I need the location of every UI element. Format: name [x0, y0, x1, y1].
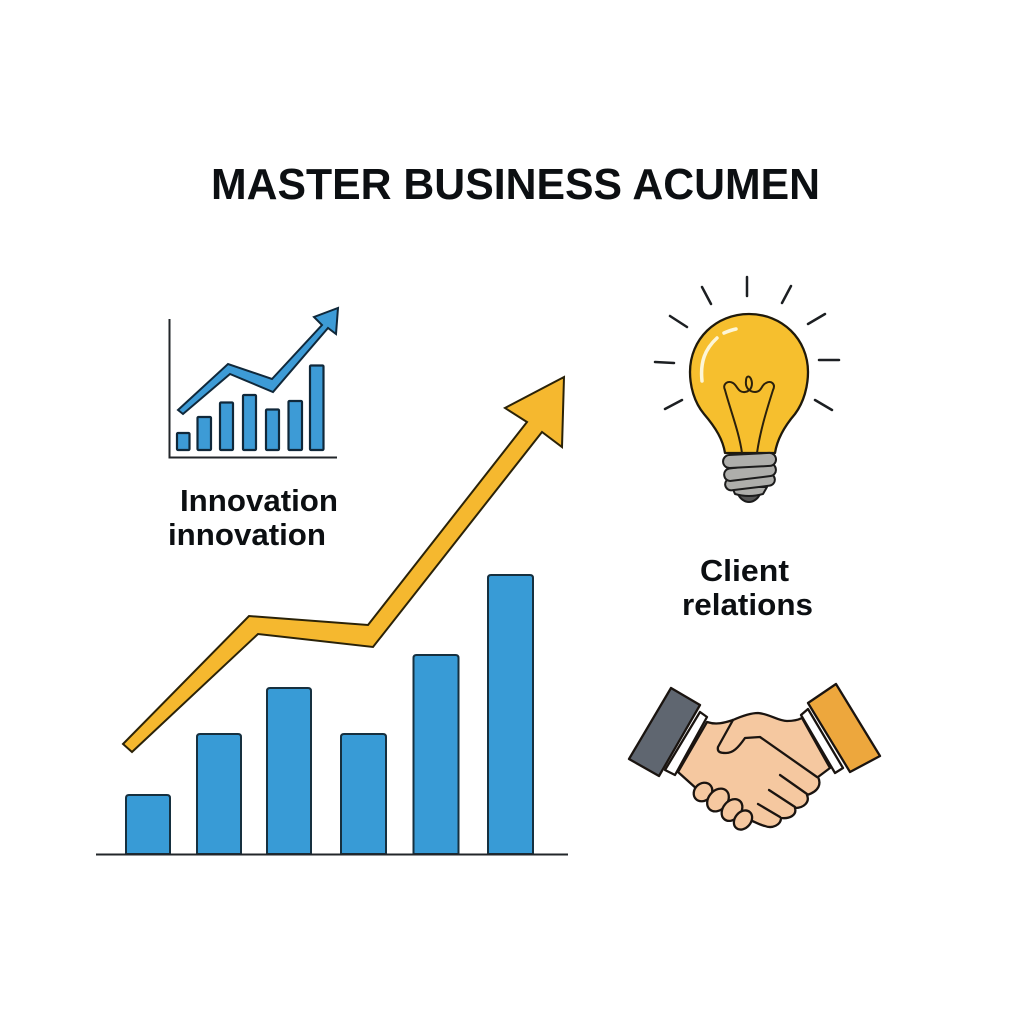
label: innovation: Innovation — [180, 483, 338, 518]
bulb glass — [690, 314, 808, 453]
label: client relations: relations — [682, 587, 813, 622]
clasped hands — [678, 713, 830, 827]
bulb filament — [724, 377, 774, 453]
title: MASTER BUSINESS ACUMEN — [211, 160, 820, 209]
left dark jacket sleeve — [629, 688, 700, 776]
label: client relations — [682, 553, 813, 622]
hand detail lines — [718, 720, 817, 817]
right orange jacket sleeve — [808, 684, 880, 772]
bulb screw base — [723, 453, 777, 502]
main chart bars — [126, 575, 533, 854]
label: client relations: Client — [700, 553, 789, 588]
label: innovation: innovation — [168, 517, 326, 552]
main chart baseline — [96, 854, 568, 856]
right white shirt cuff — [801, 709, 843, 773]
small chart bars — [177, 366, 324, 450]
main growth arrow — [123, 377, 564, 752]
icon: handshake — [629, 684, 880, 833]
left white shirt cuff — [665, 712, 707, 775]
bulb highlight — [702, 329, 736, 381]
small chart axes — [170, 319, 337, 458]
bulb rays — [655, 277, 839, 410]
label: innovation — [168, 483, 338, 552]
small chart trend arrow — [178, 308, 338, 414]
icon: light bulb — [655, 277, 839, 502]
main bar chart — [96, 575, 568, 854]
small bar chart icon with arrow — [170, 308, 338, 458]
clasped fingers — [690, 779, 756, 833]
